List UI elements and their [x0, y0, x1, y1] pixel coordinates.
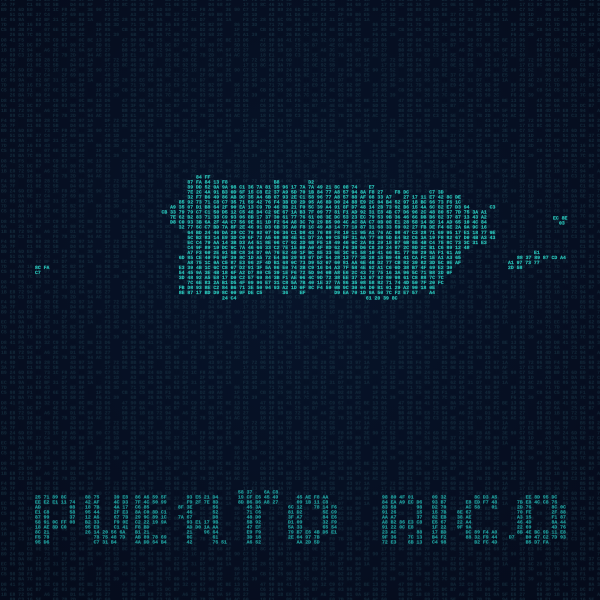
letter T: 71 C6	[238, 510, 261, 516]
letter R: 93 E1 17 9B	[178, 520, 218, 526]
letter U: C7 31 B4	[85, 540, 117, 546]
letter T: A6 52	[238, 540, 261, 546]
letter T: 58 37 6A C8	[238, 489, 278, 495]
map: main island of Puerto Rico in hex digits: 6D 85 CE 40 F6 0F 39 8C 1D A5 72 E4 B6 29 93 07 DF 54 28 13 77 35 28 15 B9 48 41 CA FC 1E A1 A3 65	[162, 255, 461, 261]
letter P: E1 C8 58	[35, 510, 75, 516]
letter C: 8C D3 A5	[457, 494, 497, 500]
map: Vieques island	[508, 250, 566, 271]
letter E: 4A DD 64 B4	[135, 540, 167, 546]
letter O: 22 69 4D 76	[517, 525, 566, 531]
letter I: 09 32	[432, 494, 447, 500]
letter O: 7B E8 4C C8 76	[517, 499, 557, 505]
letter I: 15 7B	[432, 510, 447, 516]
letter E: 8A C0 8D C1	[135, 510, 167, 516]
map: Culebra island	[553, 215, 568, 226]
letter O	[517, 494, 566, 546]
letter E: 7F 4C 50 99	[135, 499, 167, 505]
letter C: DC 89 F4 A0	[457, 530, 497, 536]
letter U: 12 A6 67 7B	[85, 514, 128, 520]
letter C: E8 ED F7 48	[457, 499, 497, 505]
letter R: 72 E3 6B 13	[382, 540, 422, 546]
letter T: 19 CF E6 45 49	[238, 494, 278, 500]
map: Vieques island: A1 97 73 77	[508, 260, 540, 266]
letter O: 09 1B 11 C8	[288, 499, 328, 505]
letter C: B2 FC 4D	[457, 540, 497, 546]
letter U: 88 75 39 E8	[85, 494, 128, 500]
letter E: F8 BD	[135, 525, 150, 531]
letter I: 82 EB	[432, 514, 447, 520]
letter C: AC 58 01	[457, 504, 497, 510]
map: main island of Puerto Rico in hex digits: D8 C0 93 3B 6A 2F 4A C7 56 9E 81 1D F2 64 A8 3C 70 29 B5 90 4C AC 8A C7 0B 08 E1 28 58 14 8C 14 AD 65 10 4C 84	[162, 220, 487, 226]
map: main island of Puerto Rico in hex digits: 3D 48 92 A5 E8 17 D0 C2 57 69 84 3B F1 AE 06 4C 9D 72 38 EE 37 13 97 92 80 98 61 C8 88 7C 7C	[162, 275, 444, 281]
letter O: B5 D7 FA	[517, 540, 549, 546]
letter U: 95 44 2F E3	[85, 510, 128, 516]
letter E: 86 A6 59 5F	[135, 494, 167, 500]
map: main island of Puerto Rico in hex digits: A8 75 1C 0A C5 87 E3 96 2F 4D B1 68 0C 73 D9 52 07 60 81 AA 6E 48 D2 77 CB 82 39 82 3D 5C 9E AF	[162, 260, 461, 266]
letter T: 5B 92	[238, 520, 261, 526]
map: Mona island	[35, 265, 50, 276]
letter O: 79 B7 E6 4B D5 E1	[288, 530, 337, 536]
map: Mona island: 8C FA	[35, 265, 50, 271]
letter T: 8D B6 B6 A8 27	[238, 499, 278, 505]
letter O: 8B 4E BC 9D 11 E8	[517, 530, 566, 536]
letter R: 91 26 15	[382, 510, 422, 516]
letter R: F9 2F 7E 8D	[178, 499, 218, 505]
letter O: 45 AE F8 AA	[288, 494, 328, 500]
letter R	[178, 494, 227, 546]
letter R: 8F 3E 56	[178, 504, 218, 510]
map: main island of Puerto Rico in hex digits: 7E 62 B2 83 71 38 C9 93 06 8B 17 37 30 61 77 76 61 08 3E DC 53 23 EC 79 53 9B 36 46 66 DB B6 82 37 87 13 43 A2	[162, 215, 487, 221]
map: main island of Puerto Rico in hex digits: 89 DD 52 0A 9A 98 C1 36 7A 81 35 96 17 7A 7A 49 21 8C 08 74 E7	[162, 184, 375, 190]
letter P	[35, 494, 75, 546]
letter O: 6C 12 78 14 F6	[288, 504, 337, 510]
map: main island of Puerto Rico in hex digits: FB D8 93 8E C2 84 B6 71 3E 50 94 93 A2 1D 0F 8C F4 59 0B 9C 30 04 D0 B1 01 29 A2 90 18 0E	[162, 285, 435, 291]
letter I: 93 B7	[432, 499, 447, 505]
map: main island of Puerto Rico in hex digits: CB 33 79 79 C7 C1 50 D5 12 C5 48 D4 C2 9E 67 1A B3 7F 09 77 81 F1 AD 92 31 E8 4B C7 D6 96 2C 48 80 57 7D 75 3A A1	[162, 210, 487, 216]
letter I	[432, 494, 447, 546]
letter U: 26 14 20 56 6A	[85, 530, 125, 536]
map: main island of Puerto Rico in hex digits: 7C 6E 83 2A B1 D5 4F 09 96 E7 31 C8 5A 7B 40 1E 37 7A 86 35 08 58 82 71 74 4D 50 7F 20 FC	[162, 280, 444, 286]
letter O: 3F A7 84 E6	[288, 514, 337, 520]
letter T: E9 F9	[238, 530, 261, 536]
letter O: 5A 33 65 54	[288, 525, 337, 531]
map: Vieques island: 88 37 89 87 CD A4	[517, 255, 566, 261]
letter R: 23 AC 88	[382, 530, 422, 536]
letter P: 8C 21	[35, 530, 50, 536]
letter C	[457, 494, 515, 546]
letter O: EE 8D 95 DC	[517, 494, 557, 500]
letter R: 8C 61	[178, 535, 218, 541]
map: main island of Puerto Rico in hex digits	[162, 174, 496, 301]
map: main island of Puerto Rico in hex digits: 84 FF	[162, 174, 211, 180]
letter O: A3 15 F1 87	[517, 514, 566, 520]
letter I: C4 98	[432, 540, 447, 546]
letter O: 81 D2 5E C9	[288, 510, 337, 516]
letter O: B0 47 C2 7D 93	[517, 535, 566, 541]
letter T: 45 3A	[238, 504, 261, 510]
letter T: 3D 18	[238, 535, 261, 541]
letter U: 78 75 48 7D	[85, 535, 125, 541]
map: main island of Puerto Rico in hex digits: 87 FA 84 13 F8 B8 D2	[162, 179, 314, 185]
letter C: 8E 67	[457, 510, 472, 516]
letter I: E5 67	[432, 520, 447, 526]
letter C: 22 A4	[457, 520, 472, 526]
map: main island of Puerto Rico in hex digits: 32 F7 B6 49 86 AB DC 35 A4 6B 07 93 2E C1 58 96 77 A8 57 88 AF 08 33 A7 27 17 11 E7 42 8C DE	[162, 194, 461, 200]
letter O: AA 2D 5D	[288, 540, 320, 546]
map: main island of Puerto Rico in hex digits: 7E 2C 4A 91 B3 0D 6F 15 C8 E2 37 A9 5D 70 1B 84 77 A8 57 94 8A F8 27 F8 DC C7 3D	[162, 189, 444, 195]
map: main island of Puerto Rico in hex digits: 64 BD 24 46 DA 29 CC 79 92 07 D6 36 C1 D8 43 76 88 F8 19 11 95 A1 76 AC 98 47 C3 28 71 69 95 17 E1 18 77 9E	[162, 230, 496, 236]
letter R: AA A7 37	[382, 514, 422, 520]
letter O: D1 09 32 F9	[288, 520, 337, 526]
letter T: 47 EF	[238, 525, 261, 531]
letter P: EE E2 E1 11 74	[35, 499, 75, 505]
letter P: AD 08	[35, 504, 75, 510]
letter C: 9F 9A	[457, 525, 472, 531]
map: main island of Puerto Rico in hex digits: 85 92 73 71 C8 C7 35 71 59 42 76 F4 3B E0 2D 95 A6 8D D0 24 88 E9 2C 04 B4 52 97 18 BC 66 73 F6 1C	[162, 200, 461, 206]
letter E	[135, 494, 167, 546]
letter U: B2 33 F9 0E	[85, 520, 128, 526]
letter E: AB 89 78 69	[135, 535, 167, 541]
letter P: 25 71 89 8C	[35, 494, 67, 500]
letter R: 83 58 98	[382, 504, 422, 510]
map: main island of Puerto Rico in hex digits: A9 35 07 D1 B8 64 2F 90 EA 13 C9 7D 46 8B 21 F0 5C 39 A4 91 8F D7 48 14 2B 73 92 B6 15 4A 6C 82 E7 D3 94 C3	[162, 204, 496, 210]
letter O: 70 FE 2F 88	[517, 510, 566, 516]
letter E: B1 21	[135, 530, 150, 536]
map: Culebra island: 03	[559, 220, 565, 226]
letter R: 91 22 0C E8	[382, 525, 414, 531]
letter O: 2D 76 8C 0C	[517, 504, 566, 510]
letter C: 38 AE	[457, 514, 472, 520]
letter R: 9F 36 7C 13	[382, 535, 422, 541]
map: main island of Puerto Rico in hex digits: EC C4 79 AA 14 3B D3 A4 51 8E 06 C7 92 2D 6B F5 18 49 46 0C 2A 83 29 18 B7 6B 85 4B C4 75 8C 73 3C 31 E3	[162, 240, 487, 246]
letter E: C2 22 19 9A	[135, 520, 167, 526]
letter T	[238, 489, 278, 546]
letter P: 87 99 37	[35, 514, 75, 520]
map: Mona island: C7	[35, 270, 41, 276]
map: main island of Puerto Rico in hex digits: 32 77 5C C7 BD 7A 8F 2E 46 91 D3 6B 35 A0 F8 1C 49 A8 14 77 10 87 31 68 33 59 02 27 FB DE F4 6E 2A 9A 9C 16	[162, 225, 487, 231]
letter O: 2E 04 97 7B	[288, 535, 320, 541]
letter E: 29 9C 89 1C	[135, 514, 167, 520]
map: Culebra island: EC 8E	[553, 215, 568, 221]
letter R: 42 76 51	[178, 540, 227, 546]
map: main island of Puerto Rico in hex digits: C4 9F 89 19 DC 9C 7A 46 66 33 C2 7E 15 B9 A0 4F 8D 62 F6 38 D6 C8 29 24 87 2C 8D 2C B1 C6 89 12 48	[162, 245, 470, 251]
letter R: 84 EA A9 EC D6	[382, 499, 422, 505]
letter U: 18 7B 4A 17	[85, 504, 128, 510]
letter P: F5 78	[35, 535, 50, 541]
letter E: C6 85	[135, 504, 150, 510]
letter P: 95 D6	[35, 540, 50, 546]
title: PUERTO RICO spelled in hex digit blocks	[35, 489, 566, 546]
map: main island of Puerto Rico in hex digits: 5C B2 83 14 E9 3D C0 6F 72 A5 08 9B 4E 61 D7 2A 90 C5 8F 31 6A 77 0B 5D E4 B2 C6 3A 19 F8 82 67 D0 4B A3 43	[162, 235, 496, 241]
letter I: D2 70	[432, 504, 447, 510]
letter R: AD D0 1A AA	[178, 525, 218, 531]
letter R	[382, 494, 422, 546]
map: main island of Puerto Rico in hex digits: 54 45 9A 3E 4B 18 6F A2 D7 80 C5 39 1E F6 72 5D 94 0B A8 E6 2C 43 72 75 16 3A 96 5C 71 B8 2D 0F	[162, 270, 452, 276]
letter T: 48 D0	[238, 514, 261, 520]
letter I: B4 F2	[432, 535, 447, 541]
map: main island of Puerto Rico in hex digits: 24 C4 61 20 39 8C	[162, 295, 398, 301]
map: main island of Puerto Rico in hex digits: E3 39 4B 1C 6C C8 07 D2 91 3F 5A 86 E0 74 2B C9 16 D4 A3 7F 58 4E 92 A1 C6 0D 38 B7 4F 69 E2 30	[162, 265, 452, 271]
letter I: 1F 22	[432, 525, 447, 531]
letter P: 58 91 0C FF 08	[35, 520, 75, 526]
map: Vieques island: E1	[534, 250, 540, 256]
letter O	[288, 494, 337, 546]
letter R: 21 96 64	[178, 530, 218, 536]
letter U: 95 E9 C1 41	[85, 525, 128, 531]
map: Vieques island: 2D 58	[508, 265, 523, 271]
letter I: 17 BD	[432, 530, 447, 536]
letter R: 7A 67 D8	[178, 514, 218, 520]
letter R: A8 B2 86 E3 C8	[382, 520, 422, 526]
letter U	[85, 494, 128, 546]
letter C: 88 32 F9 44 D7	[457, 535, 515, 541]
letter R: 98 80 4F 01	[382, 494, 414, 500]
letter R: 46 52	[178, 510, 218, 516]
letter P: 18 AE 8D C0	[35, 525, 67, 531]
map: main island of Puerto Rico in hex digits: A7 F3 60 2E 91 5B C8 34 D7 0A 76 E2 49 1F BC 85 33 6E 3C 01 58 10 41 66 B1 77 80 29 8A F1 61 A9	[162, 250, 461, 256]
map: main island of Puerto Rico in hex digits: 8E 87 17 BD D9 8C 00 9F DE C5 36 EF D9 EA 70 1D 9A 50 7C F2 E7 57 A4	[162, 290, 435, 296]
letter O: 46 4D 8A 44	[517, 520, 566, 526]
letter R: 93 E5 21 D4	[178, 494, 218, 500]
letter U: 42 AF 4C D3	[85, 499, 128, 505]
